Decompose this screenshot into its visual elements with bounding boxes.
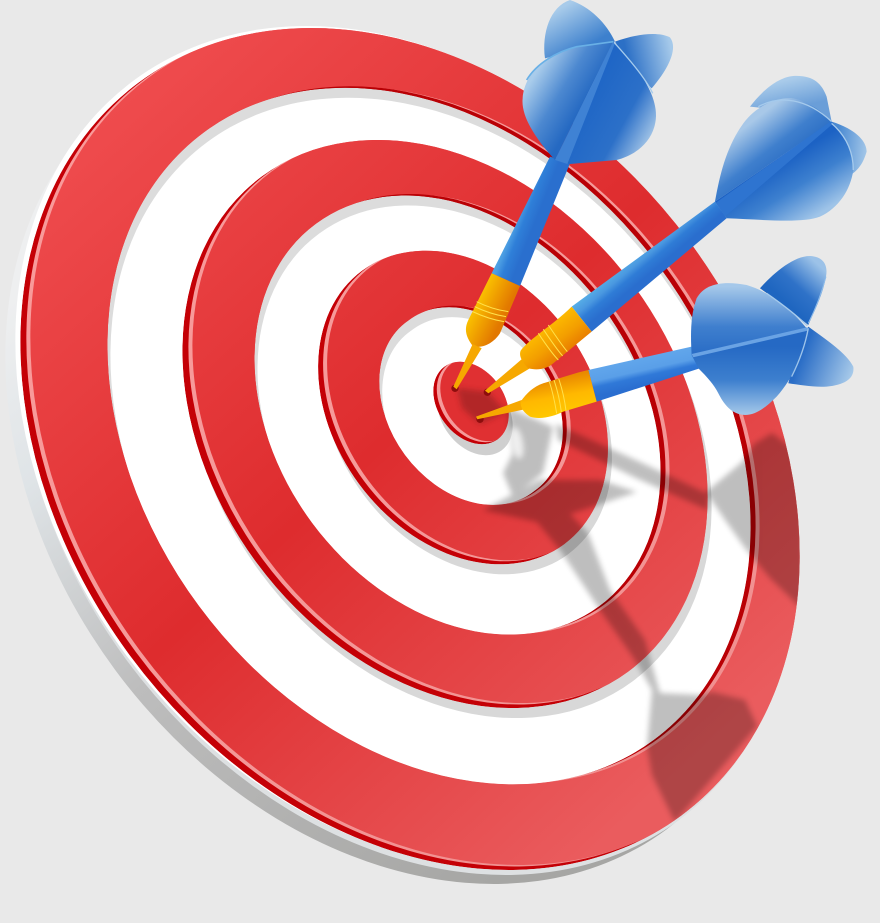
third white ring bbox=[379, 307, 566, 515]
dart 1 barrel and needle bbox=[451, 273, 520, 392]
dart 2 shaft bbox=[572, 202, 727, 332]
dart 2 front flights bbox=[715, 98, 853, 221]
dart shadows on the board bbox=[483, 407, 803, 822]
second red ring bbox=[182, 135, 718, 708]
dart 3 shaft bbox=[588, 347, 700, 402]
dart 3 barrel and needle bbox=[476, 370, 597, 423]
second white ring bbox=[254, 195, 664, 645]
dart 1 shaft bbox=[492, 157, 570, 286]
third red ring bbox=[318, 247, 617, 564]
dart 2 bbox=[484, 76, 867, 396]
dart 1 back flights bbox=[544, 0, 673, 88]
dart 1 bbox=[451, 0, 673, 392]
dart 3 back flights bbox=[760, 256, 853, 387]
dart 2 back flights bbox=[750, 76, 867, 175]
rim of second white ring bbox=[259, 194, 670, 634]
bullseye bbox=[433, 362, 509, 444]
rim of third white ring bbox=[383, 306, 571, 504]
dart 1 front flights bbox=[522, 42, 656, 164]
rim of white ring bbox=[112, 86, 760, 783]
dart 3 front flights bbox=[691, 277, 826, 415]
dart 3 bbox=[476, 256, 853, 423]
dart 2 barrel and needle bbox=[484, 307, 592, 396]
white ring bbox=[107, 88, 754, 794]
